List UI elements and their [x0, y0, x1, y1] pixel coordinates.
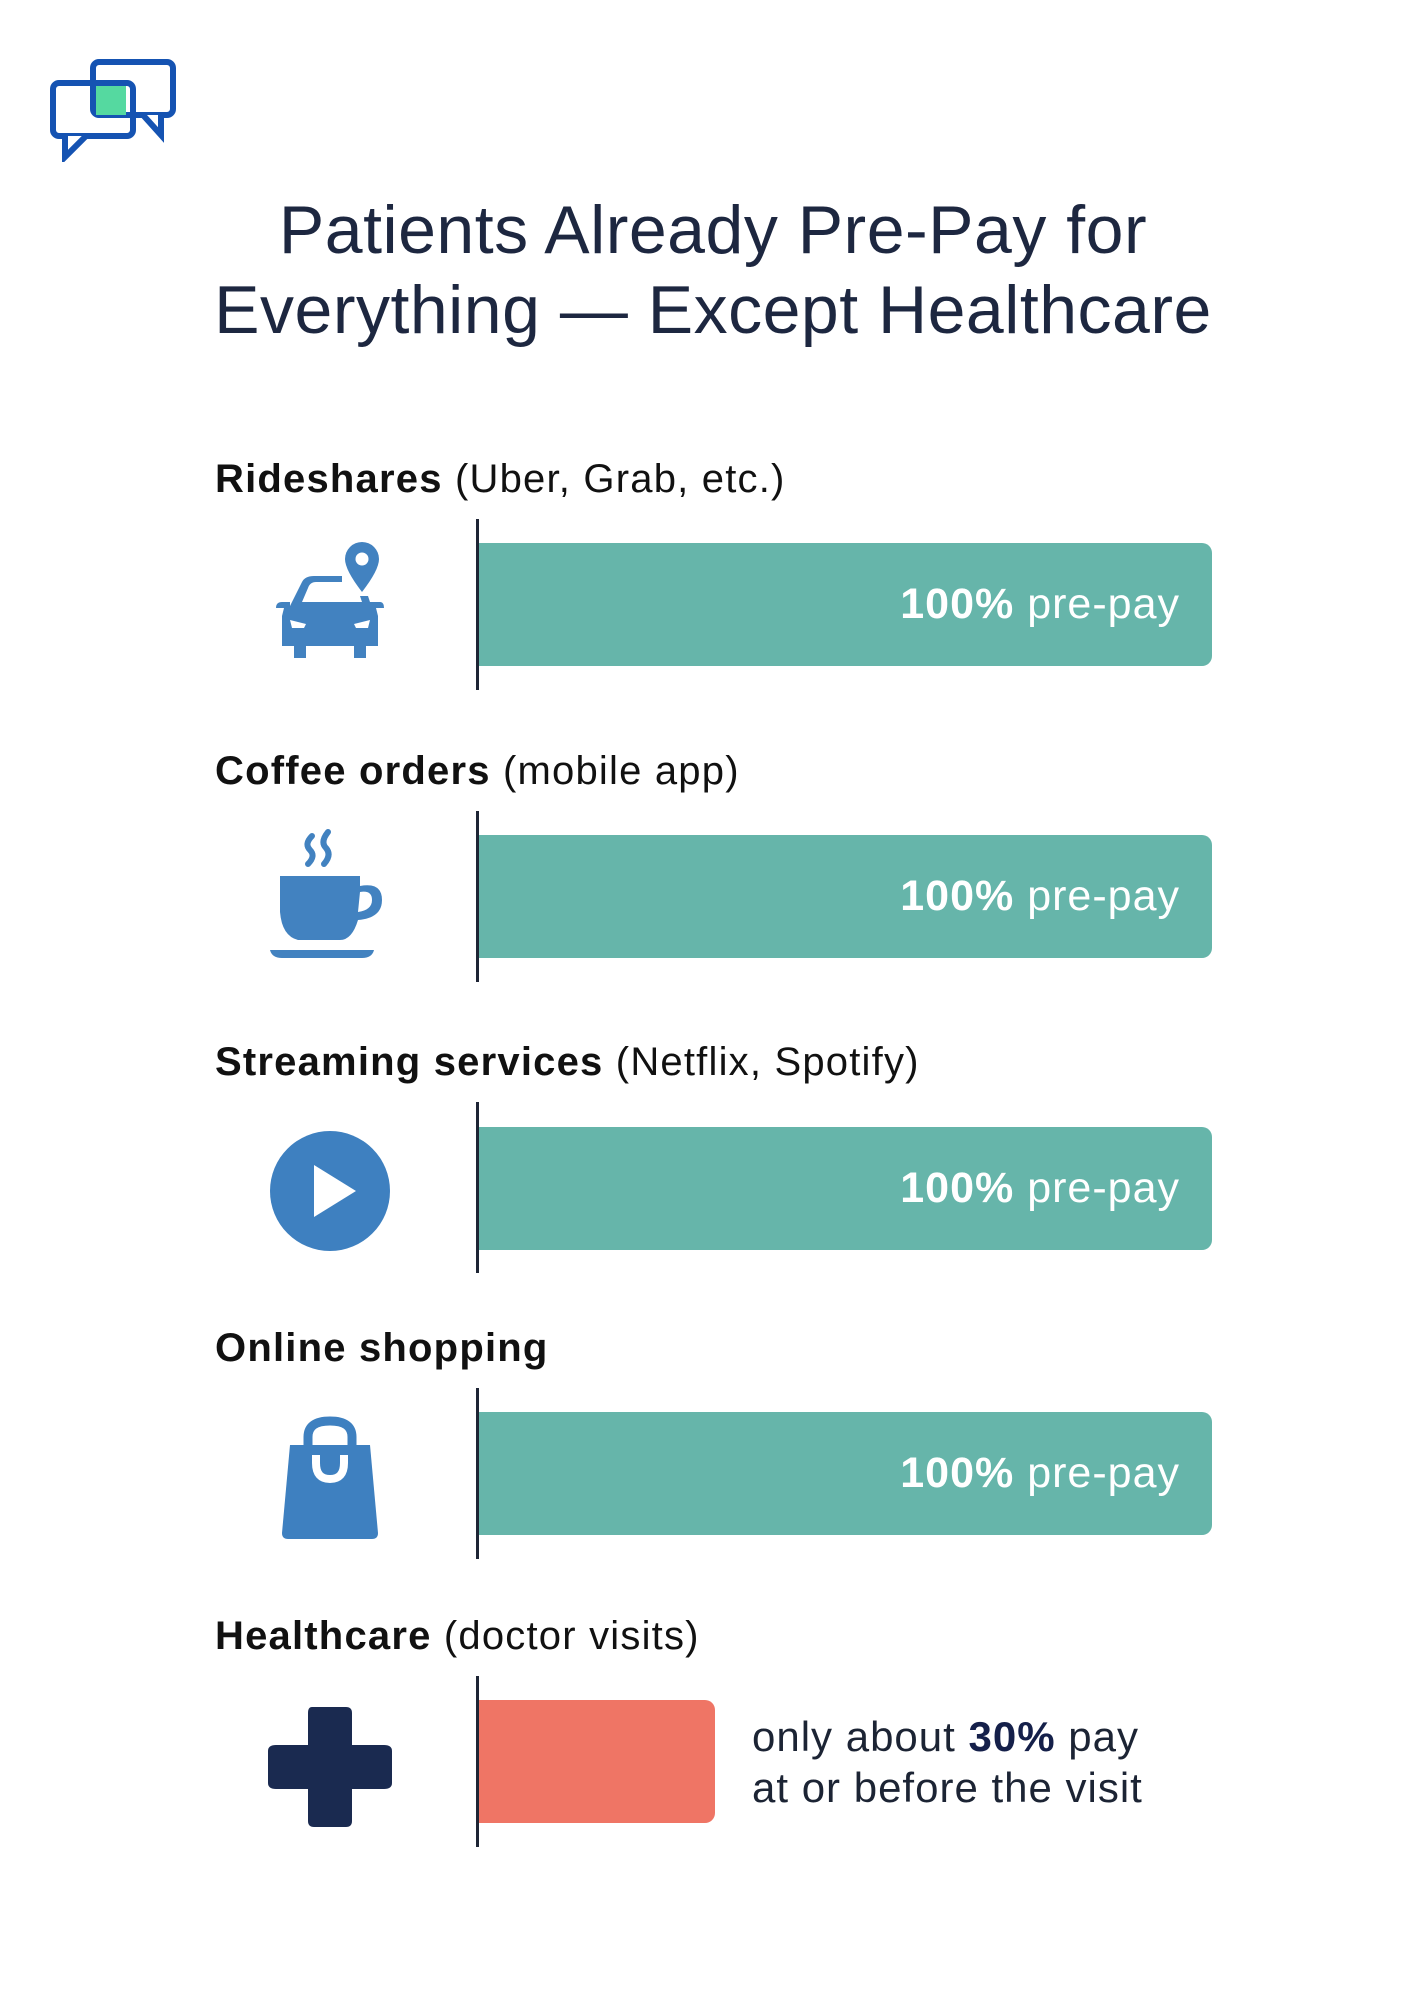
bar: 100%: [479, 543, 1212, 666]
axis: [476, 519, 479, 690]
bar: 100%: 100% pre-pay: [900, 1164, 1180, 1212]
label: shopping: Online shopping: [215, 1326, 549, 1370]
title: Patients Already Pre-Pay for: [279, 192, 1147, 268]
row: healthcare: [215, 1614, 1143, 1847]
callout text: [752, 1713, 1143, 1811]
title: [214, 192, 1212, 348]
axis: [476, 1676, 479, 1847]
row: coffee: [215, 749, 1212, 982]
label: streaming: Streaming services (Netflix, Spotify): [215, 1040, 920, 1084]
bar: 30%: [479, 1700, 715, 1823]
row: streaming: [215, 1040, 1212, 1273]
bar: 100%: 100% pre-pay: [900, 1449, 1180, 1497]
axis: [476, 1102, 479, 1273]
label: rideshares: Rideshares (Uber, Grab, etc.): [215, 457, 786, 501]
row: online shopping: [215, 1326, 1212, 1559]
icon: coffee cup: [270, 829, 382, 958]
axis: [476, 1388, 479, 1559]
icon: shopping bag: [282, 1416, 378, 1539]
bar: 100%: [479, 1412, 1212, 1535]
bar: 100%: [479, 835, 1212, 958]
label: coffee: Coffee orders (mobile app): [215, 749, 740, 793]
icon: medical cross: [268, 1707, 392, 1827]
title: Everything — Except Healthcare: [214, 272, 1212, 348]
callout text: at or before the visit: [752, 1764, 1143, 1811]
callout text: only about 30% pay: [752, 1713, 1139, 1760]
bar: 100%: [479, 1127, 1212, 1250]
label: healthcare: Healthcare (doctor visits): [215, 1614, 700, 1658]
axis: [476, 811, 479, 982]
row: rideshares: [215, 457, 1212, 690]
bar: 100%: 100% pre-pay: [900, 580, 1180, 628]
bar: 100%: 100% pre-pay: [900, 872, 1180, 920]
icon: play button: [270, 1131, 390, 1251]
icon: car with pin: [276, 542, 384, 658]
logo: chat bubbles: [50, 59, 176, 162]
